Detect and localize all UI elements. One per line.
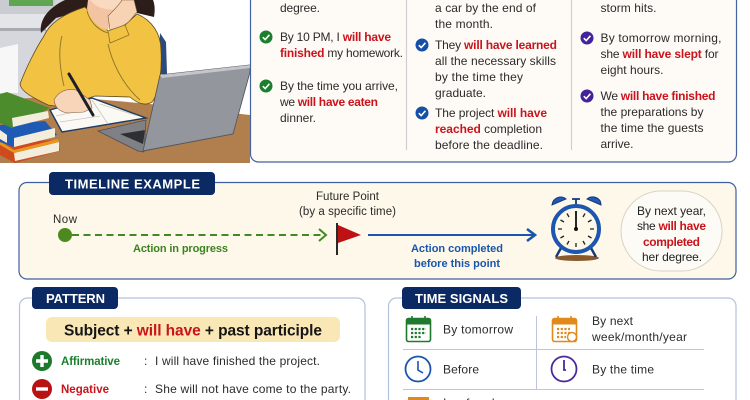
icon: blue check <box>416 106 428 120</box>
timeline start: now <box>53 214 78 242</box>
arrow: action in progress: Action in progress <box>133 243 228 255</box>
panel: pattern <box>20 287 365 400</box>
column: green examples: By the time you arrive, <box>280 79 398 93</box>
signal: by next week/month/year <box>552 314 687 344</box>
signal: by the time: By the time <box>592 362 654 376</box>
icon: blue check <box>416 38 428 52</box>
column: blue examples: reached completion <box>435 122 542 136</box>
column: blue examples: a car by the end of <box>435 1 537 15</box>
icon: green check <box>260 80 272 92</box>
column: blue examples: by the time they <box>435 70 523 84</box>
heading: time signals: TIME SIGNALS <box>415 291 508 306</box>
icon: green check <box>260 30 272 44</box>
notebook <box>50 98 146 132</box>
panel: timeline example <box>19 172 736 279</box>
column: purple examples: By tomorrow morning, <box>600 31 722 45</box>
column: blue examples: before the deadline. <box>435 138 543 152</box>
row: affirmative: : <box>144 354 147 368</box>
panel: time signals <box>388 287 736 400</box>
column: green examples <box>260 1 403 125</box>
hand with pen <box>54 89 92 113</box>
laptop <box>98 120 146 152</box>
row: affirmative: Affirmative <box>61 356 120 368</box>
formula bar <box>46 317 340 342</box>
column: blue examples: all the necessary skills <box>435 54 556 68</box>
heading: timeline example <box>49 172 215 195</box>
arrow: action completed <box>368 229 535 270</box>
column: green examples: By 10 PM, I will have <box>280 30 391 44</box>
callout: example sentence: her degree. <box>642 250 702 264</box>
column: purple examples: We will have finished <box>600 89 716 103</box>
signal: by next week/month/year: week/month/year <box>591 330 687 344</box>
heading: pattern: PATTERN <box>46 291 105 306</box>
signal: by tomorrow: By tomorrow <box>443 322 513 336</box>
arrow: action in progress <box>72 229 326 255</box>
column: blue examples: graduate. <box>435 86 486 100</box>
arrow: action completed: before this point <box>414 258 500 270</box>
label: future point <box>299 191 396 218</box>
column: purple examples: eight hours. <box>600 63 664 77</box>
heading: time signals <box>402 287 521 309</box>
callout: example sentence: she will have <box>637 219 706 233</box>
books <box>0 140 60 163</box>
column: purple examples: arrive. <box>600 137 634 151</box>
illustration: student at desk <box>0 0 250 163</box>
signal: cut-off third row <box>408 396 513 400</box>
column: purple examples: storm hits. <box>600 1 656 15</box>
signal: before <box>406 356 479 382</box>
column: purple examples <box>580 1 722 151</box>
signal: by tomorrow <box>406 316 513 342</box>
callout: example sentence: By next year, <box>637 204 706 218</box>
formula bar: Subject + will have + past participle <box>64 322 322 340</box>
column: blue examples: They will have learned <box>435 38 557 52</box>
row: negative: : <box>144 382 147 396</box>
row: negative <box>32 379 351 399</box>
icon: purple check <box>580 90 594 102</box>
column: green examples: degree. <box>280 1 320 15</box>
signal: by the time <box>552 356 654 382</box>
column: purple examples: the time the guests <box>600 121 704 135</box>
heading: pattern <box>32 287 118 309</box>
column: blue examples: The project will have <box>435 106 547 120</box>
callout: example sentence <box>621 191 722 271</box>
column: green examples: dinner. <box>280 111 316 125</box>
column: purple examples: the preparations by <box>600 105 704 119</box>
face and hand <box>87 0 125 30</box>
callout: example sentence: completed <box>643 235 700 249</box>
signal: before: Before <box>443 362 479 376</box>
column: green examples: we will have eaten <box>279 95 378 109</box>
panel: examples <box>250 0 736 162</box>
desk <box>0 96 250 163</box>
column: blue examples <box>416 1 557 152</box>
signal: by next week/month/year: By next <box>592 314 634 328</box>
row: negative: She will not have come to the party. <box>155 382 351 396</box>
row: negative: Negative <box>61 384 109 396</box>
column: purple examples: she will have slept for <box>600 47 718 61</box>
column: green examples: finished my homework. <box>280 46 403 60</box>
label: future point: Future Point <box>316 191 380 203</box>
row: affirmative <box>32 351 320 371</box>
column: blue examples: the month. <box>435 17 493 31</box>
timeline start: now: Now <box>53 214 78 226</box>
label: future point: (by a specific time) <box>299 206 396 218</box>
row: affirmative: I will have finished the project. <box>155 354 320 368</box>
icon: alarm clock <box>552 197 601 261</box>
heading: timeline example: TIMELINE EXAMPLE <box>65 176 200 192</box>
icon: red flag <box>337 223 361 255</box>
sweater <box>20 7 161 107</box>
icon: purple check <box>580 32 594 44</box>
arrow: action completed: Action completed <box>411 243 503 255</box>
